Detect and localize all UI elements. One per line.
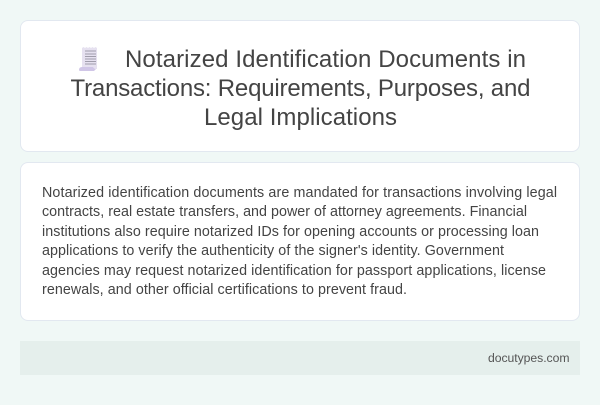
footer text: source: docutypes.com (488, 351, 570, 365)
icon: document scroll (79, 47, 97, 71)
panel: title card (20, 20, 580, 152)
body text (42, 185, 557, 298)
body text: renewals, and other official certifications to prevent fraud. (42, 282, 407, 298)
body text: applications to verify the authenticity of the signer's identity. Government (42, 243, 504, 259)
heading (70, 46, 530, 131)
panel: description card (20, 162, 580, 321)
heading: Notarized Identification Documents in (125, 46, 526, 73)
heading: Transactions: Requirements, Purposes, and (70, 75, 530, 102)
body text: Notarized identification documents are mandated for transactions involving legal (42, 185, 557, 201)
body text: institutions also require notarized IDs for opening accounts or processing loan (42, 224, 539, 240)
footer bar (20, 341, 580, 375)
body text: contracts, real estate transfers, and power of attorney agreements. Financial (42, 204, 527, 220)
body text: agencies may request notarized identification for passport applications, license (42, 263, 546, 279)
heading: Legal Implications (204, 104, 397, 131)
